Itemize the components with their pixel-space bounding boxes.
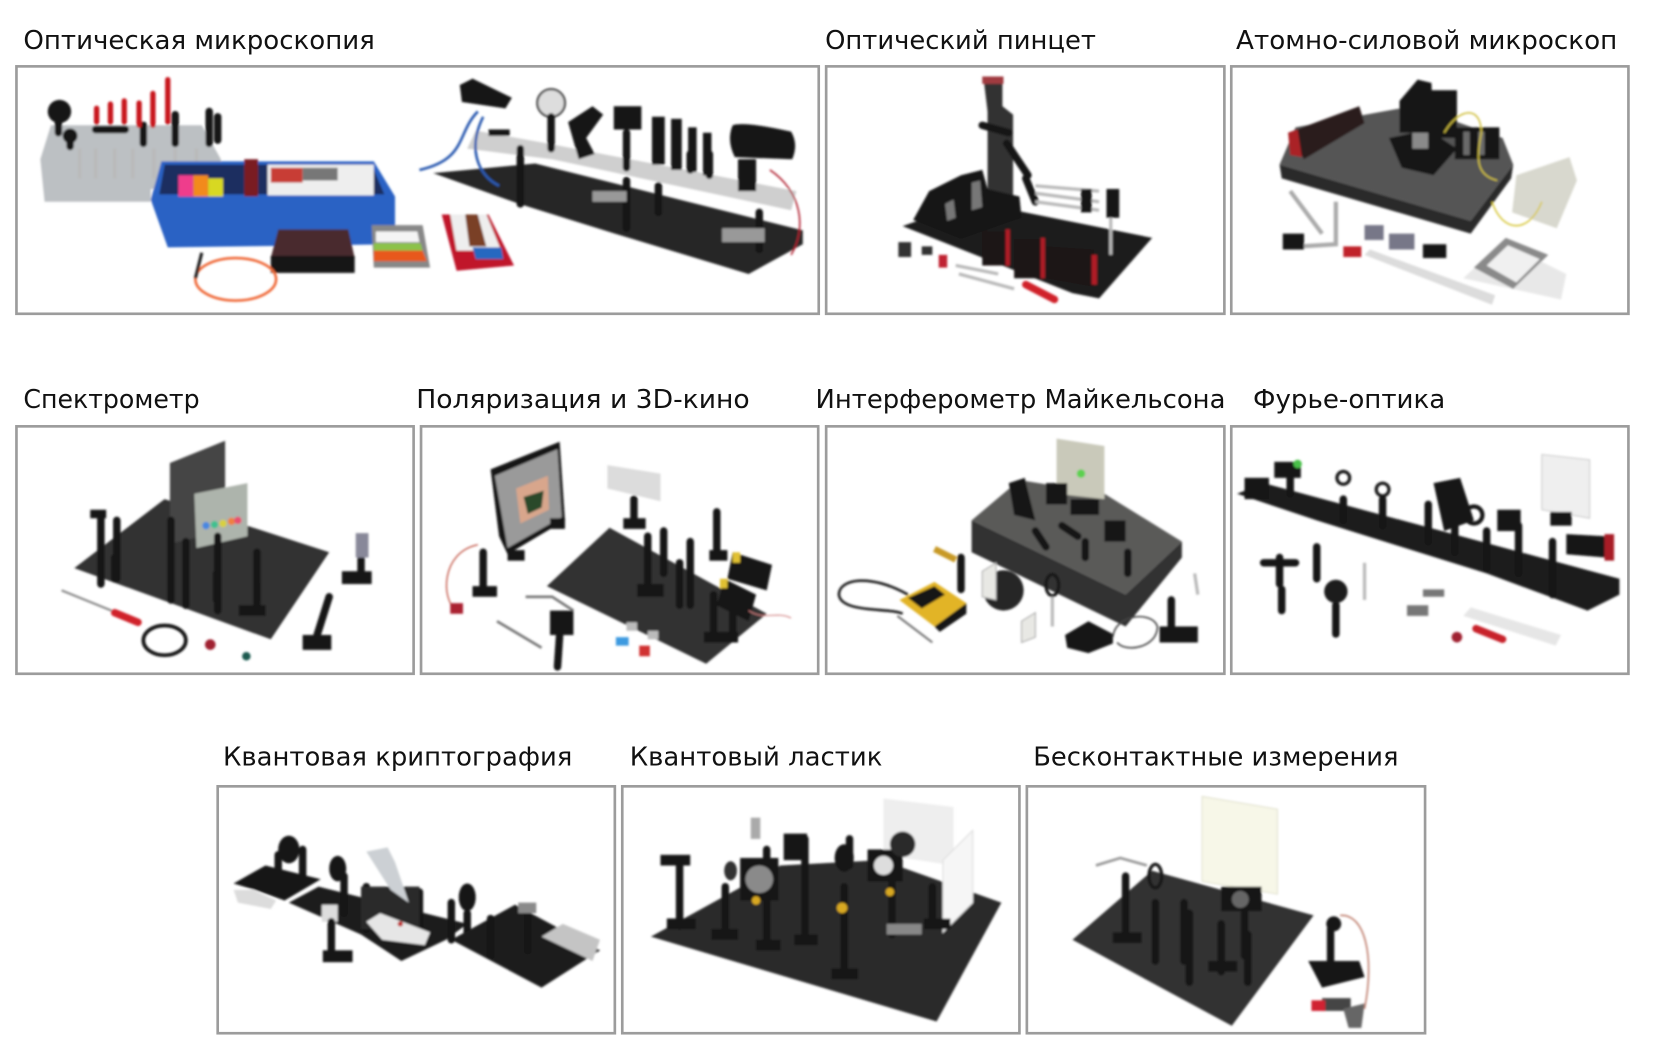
- frame: [218, 786, 615, 1033]
- illustration: quantum eraser: [651, 799, 1001, 1022]
- white side screen: [943, 830, 973, 932]
- connector with red tip: [1322, 998, 1351, 1011]
- white plates: [982, 563, 1035, 642]
- meter cable and probe: [839, 581, 908, 614]
- heading: Фурье-оптика: [1253, 385, 1445, 415]
- red tray: [442, 215, 514, 271]
- rail rods: [1035, 186, 1099, 210]
- coiled cable and mount: [1113, 617, 1157, 648]
- heading: Оптический пинцет: [825, 26, 1096, 56]
- small parts and tools: [898, 242, 932, 257]
- posts: [680, 839, 892, 975]
- lens mounts: [661, 850, 903, 900]
- mirrors and mounts: [1009, 478, 1126, 542]
- left fiber mount: [447, 545, 478, 611]
- frame: [16, 426, 414, 674]
- laser source: [1245, 462, 1301, 499]
- right side mounts: [358, 557, 365, 579]
- posts and mounts on board: [1126, 876, 1245, 982]
- illustration: optical tweezers: [898, 76, 1152, 299]
- loose parts: [1264, 547, 1336, 634]
- mount with yellow rod: [934, 549, 956, 560]
- illustration: quantum cryptography: [234, 836, 600, 988]
- frame: [1027, 786, 1425, 1033]
- frame: [826, 66, 1224, 314]
- cable coil: [143, 625, 186, 655]
- screen with green dot: [1057, 439, 1104, 499]
- long board: [1237, 483, 1619, 611]
- gray controller box: [1512, 157, 1577, 228]
- illustration: microscopy kit: [40, 79, 803, 301]
- heading: Квантовый ластик: [630, 743, 882, 773]
- brown device: [271, 229, 355, 258]
- blue box: [151, 161, 395, 247]
- orange fiber cable: [1340, 915, 1369, 1009]
- heading: Спектрометр: [23, 385, 200, 415]
- illustration: Fourier optics: [1237, 454, 1619, 646]
- booklet: [1463, 242, 1566, 299]
- lens ring: [1046, 574, 1059, 596]
- yellow knobs: [752, 896, 760, 905]
- metal plate: [887, 924, 922, 934]
- panel: Атомно-силовой микроскоп: [1231, 26, 1628, 314]
- illustration: Michelson interferometer: [839, 439, 1198, 653]
- white back screen: [884, 799, 954, 865]
- frame: [826, 426, 1224, 674]
- panel: Бесконтактные измерения: [1027, 743, 1425, 1033]
- heading: Бесконтактные измерения: [1033, 743, 1399, 773]
- frame: [1231, 426, 1628, 674]
- heading: Поляризация и 3D-кино: [416, 385, 750, 415]
- side stand: [1290, 191, 1336, 246]
- board: [547, 528, 767, 664]
- gray screen: [194, 483, 247, 548]
- red tools: [97, 80, 168, 125]
- lasers: [717, 552, 772, 621]
- illustration: polarization kit: [447, 442, 791, 667]
- illustration: non-contact measurement: [1073, 796, 1369, 1028]
- panel: Оптическая микроскопия: [16, 26, 819, 314]
- fiber holder: [1096, 858, 1147, 865]
- small parts: [205, 639, 216, 650]
- frame: [421, 426, 818, 674]
- right board: [451, 905, 600, 988]
- left mount cluster: [913, 170, 1022, 239]
- panel: Оптический пинцет: [825, 26, 1224, 314]
- red screwdriver: [1476, 629, 1503, 639]
- monitor: [491, 442, 565, 554]
- bases: [667, 919, 950, 979]
- heading: Оптическая микроскопия: [23, 26, 375, 56]
- rotation stage: [983, 570, 1024, 611]
- white screen: [1542, 454, 1590, 518]
- sample tray: [372, 225, 430, 268]
- central optics: [1400, 80, 1457, 138]
- gray rack: [40, 125, 221, 202]
- laser cylinder: [1566, 534, 1606, 557]
- optics along the rail: [1290, 473, 1552, 595]
- heading: Интерферометр Майкельсона: [816, 385, 1225, 415]
- board: [651, 860, 1001, 1022]
- panel: Квантовый ластик: [622, 743, 1019, 1033]
- board: [1073, 871, 1314, 1026]
- optics cluster: [278, 850, 467, 940]
- vertical column: [983, 76, 1013, 202]
- screwdriver: [62, 590, 111, 611]
- ruler: [1463, 607, 1561, 646]
- heading: Квантовая криптография: [223, 743, 572, 773]
- optics on rail: [460, 79, 711, 175]
- optics on board: [648, 531, 733, 637]
- frame: [1231, 66, 1628, 314]
- orange cable: [195, 258, 276, 301]
- red controller row: [1288, 106, 1365, 159]
- right mount: [1327, 929, 1334, 961]
- separate mount: [322, 905, 338, 922]
- accessories: [1365, 225, 1414, 250]
- colored filters: [616, 637, 629, 646]
- table: [972, 480, 1182, 595]
- table: [1280, 106, 1513, 221]
- frame: [16, 66, 819, 314]
- panel: Квантовая криптография: [218, 743, 615, 1033]
- power adapter: [1065, 621, 1113, 653]
- panel: Фурье-оптика: [1231, 385, 1628, 674]
- breadboard with rail: [433, 164, 803, 274]
- glasses on stand: [497, 597, 573, 648]
- illustration: spectrometer: [62, 441, 372, 661]
- frame: [622, 786, 1019, 1033]
- center board: [289, 887, 467, 961]
- white box center: [366, 913, 430, 945]
- board: [74, 499, 329, 639]
- board: [903, 202, 1152, 298]
- white screen on stand: [607, 465, 661, 501]
- electronics boxes: [982, 231, 1094, 287]
- board one: [234, 865, 321, 900]
- panel: Интерферометр Майкельсона: [816, 385, 1225, 674]
- panel: Поляризация и 3D-кино: [416, 385, 818, 674]
- rainbow spectrum: [202, 517, 242, 529]
- illustration: atomic force microscope: [1280, 80, 1577, 305]
- panel: Спектрометр: [16, 385, 414, 674]
- black panel: [170, 441, 225, 544]
- heading: Атомно-силовой микроскоп: [1236, 26, 1617, 56]
- yellow meter: [899, 582, 966, 627]
- translucent screen: [1202, 796, 1277, 894]
- posts on board: [101, 518, 257, 611]
